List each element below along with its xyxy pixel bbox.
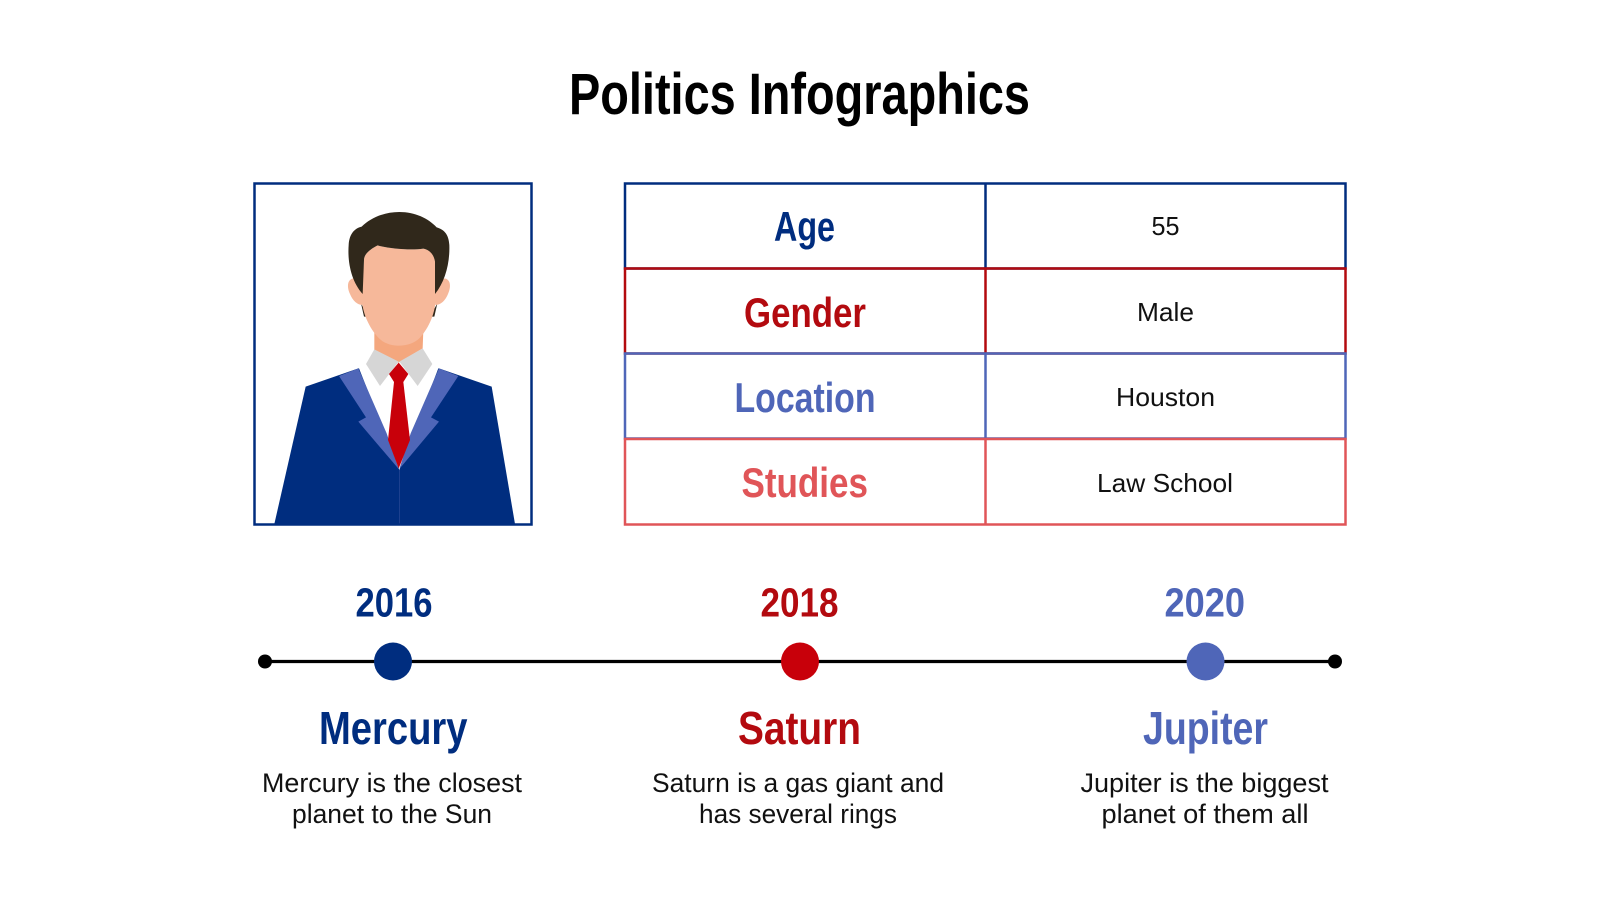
panel: portrait	[254, 184, 532, 524]
milestone: 2020 Jupiter: planet of them all	[1102, 799, 1308, 829]
row: age: Age	[774, 203, 835, 250]
row: location: Houston	[1116, 382, 1215, 412]
row: gender	[625, 268, 1346, 354]
milestone: 2020 Jupiter: 2020	[1164, 580, 1245, 626]
milestone: 2016 Mercury: 2016	[356, 580, 432, 626]
row: studies: Law School	[1097, 468, 1233, 498]
title: Politics Infographics	[569, 62, 1030, 127]
milestone: 2020 Jupiter: Jupiter is the biggest	[1080, 768, 1329, 798]
milestone: 2018 Saturn: Saturn	[738, 702, 861, 754]
milestone: 2020 Jupiter: Jupiter	[1143, 702, 1268, 754]
milestone: 2018 Saturn: Saturn is a gas giant and	[652, 768, 944, 798]
row: gender: Male	[1137, 297, 1194, 327]
row: studies: Studies	[742, 459, 868, 506]
icon: politician	[274, 212, 515, 524]
row: age: 55	[1152, 211, 1180, 241]
milestone: 2018 Saturn: 2018	[760, 580, 838, 626]
milestone: 2016 Mercury: planet to the Sun	[292, 799, 492, 829]
timeline axis	[258, 654, 1342, 668]
milestone: 2020 Jupiter	[1080, 580, 1329, 829]
milestone: 2016 Mercury: Mercury is the closest	[262, 768, 523, 798]
milestone: 2016 Mercury: Mercury	[319, 702, 468, 754]
row: studies	[625, 439, 1346, 524]
row: location: Location	[734, 374, 876, 421]
milestone: 2016 Mercury	[262, 580, 523, 829]
row: gender: Gender	[744, 289, 866, 336]
milestone: 2018 Saturn	[652, 580, 944, 829]
row: age	[625, 183, 1346, 268]
row: location	[625, 354, 1346, 438]
milestone: 2018 Saturn: has several rings	[699, 799, 897, 829]
portrait frame	[254, 184, 532, 524]
panel: profile table	[625, 183, 1346, 524]
